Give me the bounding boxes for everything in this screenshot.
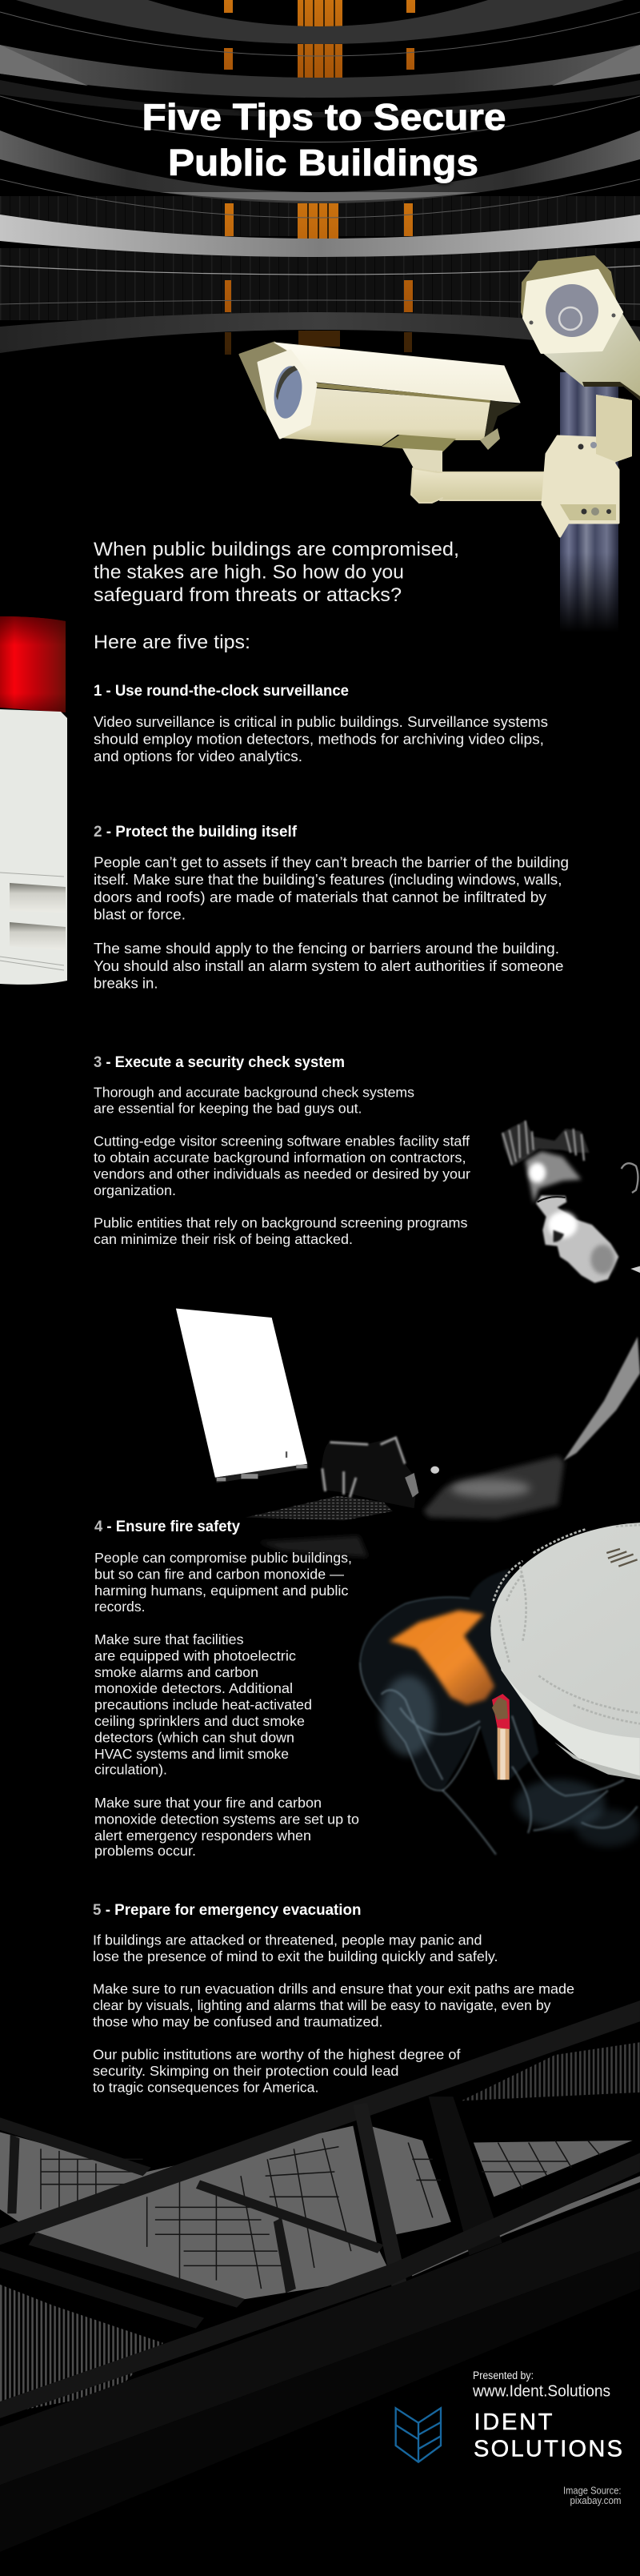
match <box>492 1694 510 1780</box>
title <box>142 96 506 183</box>
tip 2: itself. Make sure that the building’s features (including windows, walls, <box>94 871 562 888</box>
tip 5 <box>93 1902 574 2096</box>
tip 2: The same should apply to the fencing or barriers around the building. <box>94 940 559 957</box>
tip 3: are essential for keeping the bad guys out. <box>94 1100 362 1116</box>
tip 2 <box>94 824 569 991</box>
tip 5: to tragic consequences for America. <box>93 2080 318 2096</box>
intro text <box>94 539 459 653</box>
image source credit <box>563 2485 621 2506</box>
tip 3 <box>94 1054 470 1247</box>
tip 2: doors and roofs) are made of materials that cannot be infiltrated by <box>94 889 547 905</box>
icon: laptop and typing hands <box>176 1309 640 1557</box>
intro text: the stakes are high. So how do you <box>94 562 404 583</box>
tip 4: but so can fire and carbon monoxide — <box>94 1566 344 1582</box>
tip 3: Thorough and accurate background check systems <box>94 1084 414 1100</box>
staircase photo <box>0 2000 640 2552</box>
tip 5: lose the presence of mind to exit the building quickly and safely. <box>93 1948 498 1964</box>
intro text: Here are five tips: <box>94 632 250 653</box>
icon: man's face <box>502 1121 640 1283</box>
tip 3: organization. <box>94 1182 176 1198</box>
flame <box>390 1611 494 1705</box>
tip 1 <box>94 683 548 764</box>
tip 3: Public entities that rely on background screening programs <box>94 1215 468 1231</box>
tip 4: circulation). <box>94 1761 167 1777</box>
tip 3: Cutting-edge visitor screening software enables facility staff <box>94 1134 470 1150</box>
tip 3: 3 - Execute a security check system <box>94 1054 345 1071</box>
tip 2: You should also install an alarm system to alert authorities if someone <box>94 957 563 974</box>
icon: security camera front <box>240 343 546 503</box>
logo wordmark <box>474 2409 622 2462</box>
tip 5: If buildings are attacked or threatened, people may panic and <box>93 1932 482 1948</box>
tip 4: People can compromise public buildings, <box>94 1550 352 1566</box>
tip 4: alert emergency responders when <box>94 1828 311 1844</box>
tip 3: to obtain accurate background information on contractors, <box>94 1150 466 1166</box>
tip 4: detectors (which can shut down <box>94 1729 294 1745</box>
tip 4: 4 - Ensure fire safety <box>94 1519 240 1535</box>
tip 2: breaks in. <box>94 975 158 991</box>
image source credit: Image Source: <box>563 2485 621 2496</box>
icon: support pole <box>560 372 618 632</box>
tip 4: records. <box>94 1599 146 1615</box>
tip 1: should employ motion detectors, methods for archiving video clips, <box>94 730 544 748</box>
tip 4: smoke alarms and carbon <box>94 1664 258 1680</box>
icon: Ident Solutions shield logo <box>396 2408 441 2462</box>
tip 4: problems occur. <box>94 1843 196 1859</box>
tip 2: blast or force. <box>94 906 186 922</box>
tip 4: precautions include heat-activated <box>94 1697 312 1713</box>
tip 5: Make sure to run evacuation drills and ensure that your exit paths are made <box>93 1980 574 1996</box>
icon: red alarm siren <box>0 616 67 985</box>
tip 1: and options for video analytics. <box>94 748 302 764</box>
tip 4: monoxide detectors. Additional <box>94 1680 293 1696</box>
presented by: www.Ident.Solutions <box>472 2382 610 2400</box>
tip 1: Video surveillance is critical in public buildings. Surveillance systems <box>94 713 548 730</box>
tip 4: Make sure that facilities <box>94 1631 244 1647</box>
title: Five Tips to Secure <box>142 96 506 138</box>
tip 5: Our public institutions are worthy of the highest degree of <box>93 2046 461 2062</box>
presented by: Presented by: <box>473 2369 534 2381</box>
intro text: safeguard from threats or attacks? <box>94 584 402 606</box>
tip 2: 2 - Protect the building itself <box>94 824 298 841</box>
icon: smoke detector with burning match <box>360 1523 640 1855</box>
tip 3: can minimize their risk of being attacked. <box>94 1231 353 1247</box>
building photo header <box>0 0 640 372</box>
tip 4: monoxide detection systems are set up to <box>94 1811 359 1827</box>
detector body <box>490 1523 640 1780</box>
tip 3: vendors and other individuals as needed or desired by your <box>94 1166 470 1182</box>
tip 5: those who may be confused and traumatized. <box>93 2014 382 2030</box>
icon: security camera rear with bracket <box>522 256 640 536</box>
tip 1: 1 - Use round-the-clock surveillance <box>94 683 349 700</box>
tip 4 <box>94 1519 359 1859</box>
image source credit: pixabay.com <box>570 2494 621 2506</box>
presented by <box>472 2369 610 2400</box>
tip 2: People can’t get to assets if they can’t breach the barrier of the building <box>94 853 569 871</box>
tip 4: HVAC systems and limit smoke <box>94 1746 289 1762</box>
tip 4: Make sure that your fire and carbon <box>94 1795 322 1811</box>
intro text: When public buildings are compromised, <box>94 539 459 560</box>
title: Public Buildings <box>168 142 478 183</box>
tip 5: security. Skimping on their protection could lead <box>93 2063 398 2079</box>
smoke <box>360 1569 640 1855</box>
tip 4: are equipped with photoelectric <box>94 1647 296 1663</box>
tip 5: clear by visuals, lighting and alarms that will be easy to navigate, even by <box>93 1997 551 2013</box>
logo wordmark: IDENT <box>474 2409 553 2435</box>
tip 4: ceiling sprinklers and duct smoke <box>94 1713 305 1729</box>
logo wordmark: SOLUTIONS <box>474 2437 622 2462</box>
tip 5: 5 - Prepare for emergency evacuation <box>93 1902 362 1919</box>
tip 4: harming humans, equipment and public <box>94 1583 349 1599</box>
